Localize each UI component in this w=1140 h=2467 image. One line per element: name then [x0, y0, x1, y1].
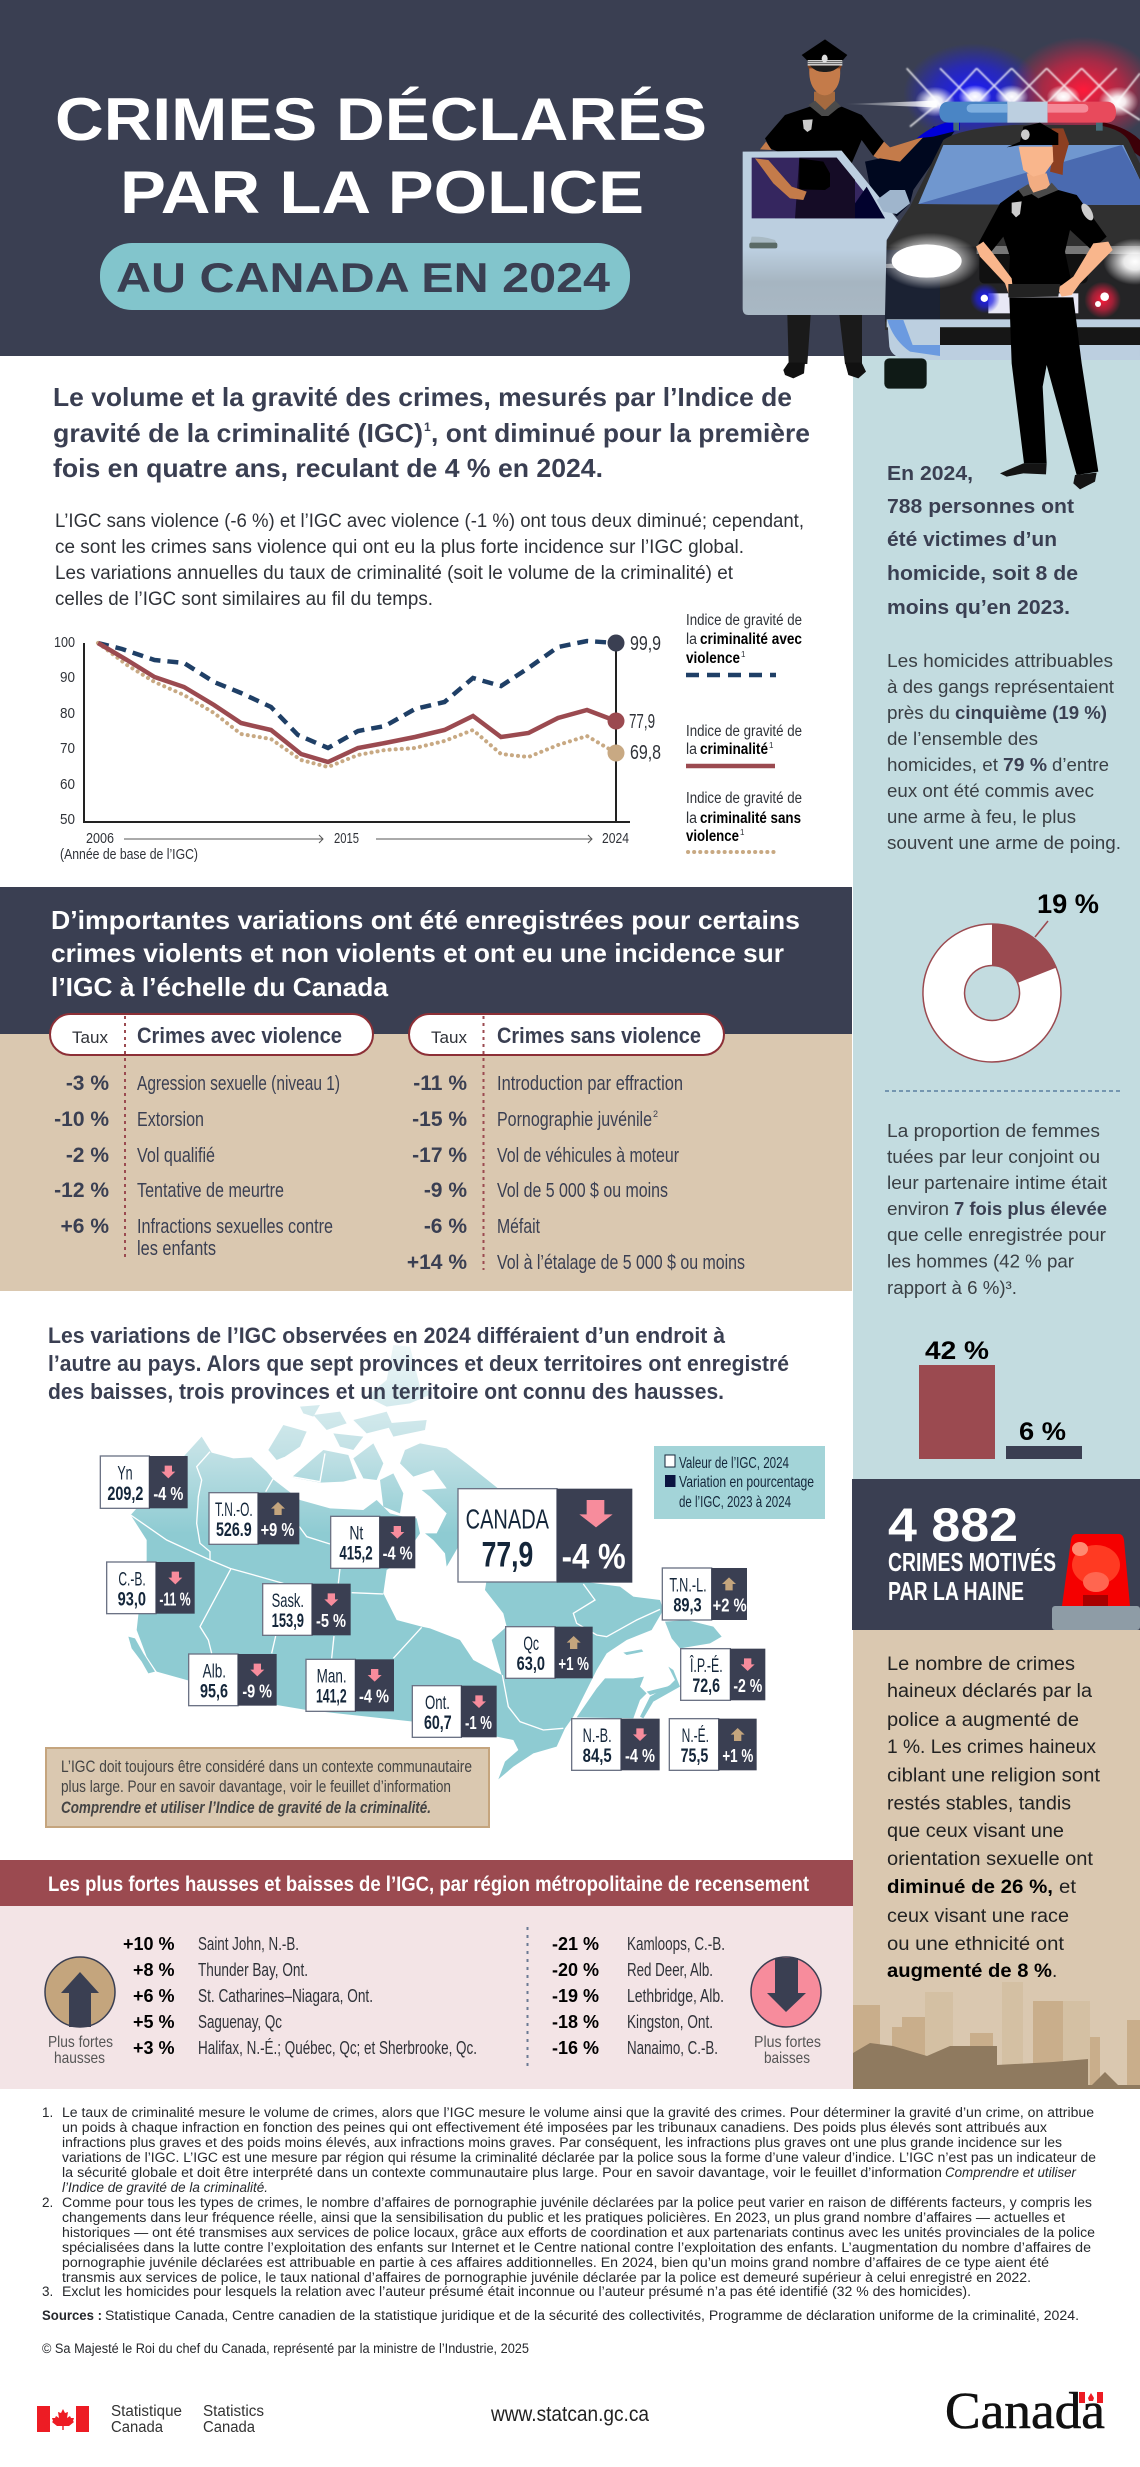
data box: Saskatchewan: -5 % [316, 1610, 346, 1631]
text block: gang-related homicides: une arme à feu, le plus [887, 807, 1076, 827]
table: violent crimes: Agression sexuelle (niveau 1) [137, 1072, 340, 1095]
text block: hate crime details: police a augmenté de [887, 1710, 1079, 1731]
list: largest increases: Thunder Bay, Ont. [198, 1960, 308, 1980]
list: largest increases: +8 % [133, 1960, 174, 1980]
line chart: 2015 [334, 831, 359, 847]
heading: crime severity decline [53, 382, 810, 483]
footnotes: l’Indice de gravité de la criminalité. [62, 2180, 268, 2195]
footnotes: historiques — ont été transmises aux services de police locaux, grâce aux efforts de coordination et aux partenariats continus avec les unités provinciales de la police [62, 2225, 1095, 2240]
data box: Canada: 77,9 [482, 1536, 533, 1575]
data box: Alberta [189, 1654, 277, 1706]
banner heading: Les plus fortes hausses et baisses de l’IGC, par région métropolitaine de recensement [48, 1873, 809, 1896]
footnotes: 1. [42, 2105, 53, 2120]
subtitle pill [100, 243, 630, 310]
data box: Ontario [412, 1686, 497, 1737]
table: violent crimes: Vol qualifié [137, 1144, 215, 1167]
text block: hate crime details: et [1059, 1877, 1077, 1898]
text block: homicide headline: été victimes d’un [887, 529, 1057, 551]
text block: gang-related homicides: homicides, et [887, 755, 998, 775]
data box: Canada [458, 1489, 632, 1583]
text block: hate crime details: Le nombre de crimes [887, 1654, 1075, 1675]
text block: gang-related homicides [887, 651, 1121, 853]
text block: homicide headline: En 2024, [887, 463, 973, 485]
list: largest decreases: -16 % [552, 2038, 599, 2058]
chart legend: criminalité avec [700, 631, 802, 648]
banner heading [0, 1860, 853, 1906]
map legend: Valeur de l’IGC, 2024 [679, 1455, 789, 1472]
callout: community context note: L’IGC doit toujours être considéré dans un contexte communautaire [61, 1758, 472, 1776]
text block: hate crime details: orientation sexuelle ont [887, 1849, 1094, 1870]
text block: hate crime details: ciblant une religion sont [887, 1766, 1101, 1786]
line chart: 90 [60, 670, 75, 686]
sidebar: hate crimes [852, 1479, 1140, 2089]
table: non-violent crimes: Pornographie juvénile [497, 1108, 652, 1131]
table: violent crimes: -12 % [54, 1179, 109, 1202]
footnotes: Comme pour tous les types de crimes, le nombre d’affaires de pornographie juvénile déclarées par la police peut varier en raison de différents facteurs, y compris les [62, 2195, 1092, 2210]
panel: metropolitan areas [0, 1860, 853, 2089]
male officer [760, 39, 954, 378]
data box: Alberta: -9 % [242, 1680, 272, 1701]
table: non-violent crimes: Crimes sans violence [497, 1023, 701, 1048]
heading: crime severity decline: Le volume et la gravité des crimes, mesurés par l’Indice de [53, 382, 792, 412]
footnotes: changements dans leur fréquence réelle, ainsi que la sensibilisation du public et les pratiques policières. En 2023, un plus grand nombre d’affaires — actuelles et [62, 2210, 1065, 2225]
list: largest increases: St. Catharines–Niagara, Ont. [198, 1986, 373, 2006]
data box: Ontario: 60,7 [424, 1713, 452, 1734]
icon: up arrow: Plus fortes [48, 2034, 113, 2051]
list: largest increases [123, 1934, 477, 2058]
footnotes: pornographie juvénile déclarées est attribuable en partie à ces affaires additionnelles. En 2024, bien qu’un moins grand nombre d’affaires de ce type aient été [62, 2255, 1049, 2270]
data box: Northwest Territories [209, 1493, 299, 1544]
footnotes: Sources : [42, 2308, 102, 2323]
footnotes: Exclut les homicides pour lesquels la relation avec l’auteur présumé était inconnue ou l’auteur présumé n’a pas été identifié (32 % des homicides). [62, 2284, 971, 2299]
list: largest decreases: -21 % [552, 1934, 599, 1954]
footnotes: spécialisées dans la lutte contre l’exploitation des enfants sur Internet et le Centre national contre l’exploitation des enfants. L’augmentation du nombre d’affaires de [62, 2240, 1091, 2255]
text block: intimate partner homicide [887, 1121, 1107, 1298]
data box: Newfoundland and Labrador: 89,3 [673, 1595, 702, 1616]
stat banner: PAR LA HAINE [888, 1576, 1024, 1606]
table: violent crimes: Extorsion [137, 1108, 204, 1131]
panel: violent and non-violent crime changes [0, 887, 852, 1291]
heading: important variations: l’IGC à l’échelle du Canada [51, 972, 389, 1002]
chart legend: violence [686, 828, 739, 845]
text block: intimate partner homicide: 7 fois plus élevée [954, 1199, 1107, 1219]
map of Canada [100, 1345, 765, 1779]
skyline illustration [853, 1982, 1140, 2089]
text block: intimate partner homicide: La proportion de femmes [887, 1121, 1100, 1141]
icon: down arrow: baisses [764, 2050, 810, 2067]
table: non-violent crimes: -17 % [412, 1144, 467, 1167]
data box: Quebec: 63,0 [517, 1654, 545, 1675]
text block: explanation [55, 511, 804, 610]
stat banner [852, 1479, 1140, 1630]
heading: regional variation [48, 1323, 789, 1404]
data box: Canada: -4 % [562, 1537, 626, 1576]
data box: British Columbia [107, 1562, 195, 1614]
list: largest decreases: Kingston, Ont. [627, 2012, 713, 2032]
table: non-violent crimes: 2 [653, 1109, 658, 1119]
table: non-violent crimes: -11 % [413, 1072, 467, 1095]
text block: explanation: Les variations annuelles du taux de criminalité (soit le volume de la criminalité) et [55, 563, 734, 584]
line chart: 99,9 [630, 633, 661, 655]
data box: Manitoba: -4 % [359, 1686, 389, 1707]
text block: intimate partner homicide: tuées par leur conjoint ou [887, 1147, 1100, 1167]
callout: community context note: Comprendre et utiliser l’Indice de gravité de la criminalité. [61, 1799, 431, 1817]
chart legend [686, 612, 802, 852]
bar chart: women vs men: 6 % [1019, 1418, 1066, 1446]
list: largest decreases: Red Deer, Alb. [627, 1960, 713, 1980]
data box: Newfoundland and Labrador [662, 1568, 747, 1620]
footnotes: Statistique Canada, Centre canadien de la statistique juridique et de la sécurité des collectivités, Programme de déclaration uniforme de la criminalité, 2024. [105, 2308, 1079, 2323]
title: PAR LA POLICE [120, 159, 644, 226]
list: largest increases: +3 % [133, 2038, 174, 2058]
data box: Yukon [100, 1456, 188, 1508]
heading: regional variation: Les variations de l’IGC observées en 2024 différaient d’un endroit à [48, 1323, 726, 1348]
bar chart: women vs men: 42 % [925, 1337, 989, 1365]
icon: up arrow [45, 1957, 115, 2067]
data box: British Columbia: 93,0 [118, 1589, 146, 1610]
data box: British Columbia: -11 % [159, 1588, 191, 1609]
map legend [654, 1446, 825, 1519]
line chart: 50 [60, 812, 75, 828]
data box: Newfoundland and Labrador: +2 % [713, 1594, 747, 1615]
data box: New Brunswick: N.-B. [583, 1726, 612, 1747]
data box: Nunavut: 415,2 [339, 1544, 373, 1565]
table: violent crimes: Crimes avec violence [137, 1023, 342, 1048]
data box: Nova Scotia: +1 % [722, 1745, 754, 1766]
table: non-violent crimes: Vol à l’étalage de 5 000 $ ou moins [497, 1251, 745, 1274]
text block: intimate partner homicide: environ [887, 1199, 949, 1219]
chart legend: 1 [740, 828, 745, 837]
chart legend: la [686, 810, 697, 827]
text block: hate crime details: diminué de 26 %, [887, 1877, 1053, 1898]
text block: hate crime details: haineux déclarés par la [887, 1681, 1092, 1702]
Statistics Canada signature: Canada [111, 2419, 163, 2436]
list: largest increases: +5 % [133, 2012, 174, 2032]
text block: hate crime details: que ceux visant une [887, 1821, 1064, 1842]
data box: Manitoba: 141,2 [316, 1687, 347, 1708]
female officer [976, 123, 1113, 489]
list: largest decreases: -19 % [552, 1986, 599, 2006]
text block: gang-related homicides: 79 % [1003, 755, 1047, 775]
list: largest increases: Saint John, N.-B. [198, 1934, 299, 1954]
Statistics Canada signature [37, 2403, 264, 2436]
list: largest increases: +10 % [123, 1934, 174, 1954]
title [55, 86, 707, 226]
data box: Northwest Territories: 526.9 [216, 1520, 252, 1541]
data box: Ontario: -1 % [465, 1712, 492, 1733]
list: largest increases: Saguenay, Qc [198, 2012, 282, 2032]
table: non-violent crimes: +14 % [407, 1251, 467, 1274]
data box: Prince Edward Island [681, 1649, 765, 1700]
stat banner: 4 882 [888, 1498, 1018, 1551]
footnotes [42, 2105, 1096, 2356]
Statistics Canada signature: Statistics [203, 2403, 264, 2420]
text block: hate crime details: augmenté de 8 % [887, 1961, 1052, 1982]
text block: homicide headline [887, 463, 1078, 619]
chart legend: 1 [741, 650, 746, 659]
data box: Quebec: Qc [523, 1634, 539, 1655]
data box: Yukon: Yn [117, 1463, 133, 1484]
table: violent crimes: Tentative de meurtre [137, 1179, 284, 1202]
heading: regional variation: l’autre au pays. Alors que sept provinces et deux territoires ont enregistré [48, 1351, 789, 1376]
text block: explanation: L’IGC sans violence (-6 %) et l’IGC avec violence (-1 %) ont tous deux diminué; cependant, [55, 511, 804, 532]
footnotes: la sécurité globale et doit être interprété dans un contexte communautaire plus large. Pour en savoir davantage, voir le feuillet d’information [62, 2165, 942, 2180]
text block: hate crime details: 1 %. Les crimes haineux [887, 1737, 1096, 1758]
chart legend: 1 [769, 741, 774, 750]
data box: Alberta: 95,6 [200, 1681, 228, 1702]
line chart: 100 [54, 635, 75, 651]
table: violent crimes: -2 % [66, 1144, 109, 1167]
data box: Newfoundland and Labrador: T.N.-L. [669, 1575, 707, 1596]
table: violent crimes: -10 % [54, 1108, 109, 1131]
text block: hate crime details [887, 1654, 1101, 1982]
data box: Prince Edward Island: Î.P.-É. [689, 1654, 723, 1677]
data box: Saskatchewan: Sask. [272, 1591, 304, 1612]
heading: crime severity decline: gravité de la criminalité (IGC) [53, 418, 423, 448]
text block: explanation: celles de l’IGC sont similaires au fil du temps. [55, 589, 433, 610]
list: largest increases: +6 % [133, 1986, 174, 2006]
icon: down arrow: Plus fortes [754, 2034, 821, 2051]
table: non-violent crimes: Introduction par effraction [497, 1072, 683, 1095]
data box: Yukon: 209,2 [107, 1484, 143, 1505]
data box: Manitoba [306, 1659, 394, 1711]
footnotes: 2. [42, 2195, 53, 2210]
Statistics Canada signature: Statistique [111, 2403, 182, 2420]
text block: gang-related homicides: d’entre [1052, 755, 1109, 775]
donut chart: 19 percent: 19 % [1037, 889, 1099, 919]
data box: Manitoba: Man. [317, 1667, 347, 1688]
text block: homicide headline: moins qu’en 2023. [887, 597, 1070, 619]
chart legend: violence [686, 650, 740, 667]
data box: Nunavut: -4 % [383, 1543, 413, 1564]
chart legend: la [686, 631, 697, 648]
data box: Nunavut [331, 1516, 415, 1568]
footnotes: 3. [42, 2284, 53, 2299]
panel: regional map [46, 1323, 825, 1827]
footnotes: infractions plus graves et des poids moins élevés, aux infractions moins graves. Par conséquent, les infractions plus graves ont une plus grande incidence sur les [62, 2135, 1062, 2150]
text block: intimate partner homicide: les hommes (42 % par [887, 1252, 1074, 1272]
data box: New Brunswick: 84,5 [583, 1746, 612, 1767]
line chart: 69,8 [630, 742, 661, 764]
data box: Quebec: +1 % [558, 1653, 589, 1674]
data box: Nova Scotia: N.-É. [682, 1724, 709, 1747]
icon: Canadian flag [37, 2406, 89, 2432]
data box: British Columbia: C.-B. [118, 1569, 146, 1590]
line chart: 77,9 [629, 711, 655, 733]
heading: important variations: D’importantes variations ont été enregistrées pour certains [51, 905, 800, 935]
table: non-violent crimes: Taux [431, 1028, 467, 1047]
heading: regional variation: des baisses, trois provinces et un territoire ont connu des hausses. [48, 1379, 724, 1404]
table: non-violent crimes: -15 % [412, 1108, 467, 1131]
list: largest decreases: -18 % [552, 2012, 599, 2032]
bar chart: women vs men [919, 1337, 1082, 1459]
data box: Canada: CANADA [466, 1503, 549, 1534]
table: violent crimes: Infractions sexuelles contre [137, 1215, 333, 1238]
panel: IGC overview [53, 382, 810, 863]
chart legend: Indice de gravité de [686, 723, 802, 740]
text block: explanation: ce sont les crimes sans violence qui ont eu la plus forte incidence sur l’IGC global. [55, 537, 744, 558]
data box: Northwest Territories: T.N.-O. [215, 1500, 253, 1521]
table: violent crimes [50, 1014, 373, 1260]
table: non-violent crimes: -9 % [424, 1179, 467, 1202]
text block: gang-related homicides: souvent une arme de poing. [887, 833, 1121, 853]
stat banner: CRIMES MOTIVÉS [888, 1547, 1056, 1577]
list: largest decreases [552, 1934, 725, 2058]
table: non-violent crimes: -6 % [424, 1215, 467, 1238]
map legend: Variation en pourcentage [679, 1474, 814, 1491]
chart legend: criminalité sans [700, 810, 801, 827]
data box: Prince Edward Island: 72,6 [692, 1676, 720, 1697]
text block: gang-related homicides: à des gangs représentaient [887, 677, 1114, 697]
line chart: 80 [60, 706, 75, 722]
footnotes: un poids à chaque infraction en fonction des peines qui ont effectivement été imposées par les tribunaux canadiens. Des poids plus élevés sont attribués aux [62, 2120, 1047, 2135]
data box: Yukon: -4 % [153, 1483, 184, 1504]
text block: intimate partner homicide: rapport à 6 %)³. [887, 1278, 1017, 1298]
data box: Ontario: Ont. [425, 1693, 450, 1714]
footnotes: variations de l’IGC. L’IGC est une mesure par région qui résume la criminalité déclarée par la police sous la forme d’une valeur d’indice. L’IGC n’est pas un indicateur de [62, 2150, 1096, 2165]
heading: crime severity decline: 1 [424, 420, 431, 434]
text block: hate crime details: ceux visant une race [887, 1906, 1069, 1927]
text block: hate crime details: . [1052, 1961, 1057, 1982]
line chart: 70 [60, 741, 75, 757]
heading: crime severity decline: fois en quatre ans, reculant de 4 % en 2024. [53, 453, 603, 483]
text block: homicide headline: 788 personnes ont [887, 496, 1074, 518]
table: non-violent crimes: Méfait [497, 1215, 540, 1238]
text block: gang-related homicides: eux ont été commis avec [887, 781, 1094, 801]
heading: important variations [51, 905, 800, 1002]
list: largest decreases: Nanaimo, C.-B. [627, 2038, 718, 2058]
donut chart: 19 percent [923, 889, 1099, 1062]
chart legend: Indice de gravité de [686, 612, 802, 629]
title: CRIMES DÉCLARÉS [55, 86, 707, 153]
callout: community context note: plus large. Pour en savoir davantage, voir le feuillet d’information [61, 1778, 451, 1796]
text block: hate crime details: restés stables, tandis [887, 1794, 1071, 1814]
data box: Saskatchewan: 153,9 [272, 1611, 304, 1632]
chart legend: la [686, 741, 697, 758]
data box: Alberta: Alb. [203, 1661, 226, 1682]
data box: Nova Scotia: 75,5 [681, 1746, 709, 1767]
icon: up arrow: hausses [54, 2050, 105, 2067]
footnotes: Comprendre et utiliser [945, 2165, 1076, 2180]
table: non-violent crimes [407, 1014, 745, 1274]
chart legend: criminalité [700, 741, 768, 758]
text block: gang-related homicides: cinquième (19 %) [955, 703, 1107, 723]
Statistics Canada signature: Canada [203, 2419, 255, 2436]
footnotes: transmis aux services de police, le taux national d’affaires de pornographie juvénile déclarée par la police est demeuré supérieur à celui enregistré en 2022. [62, 2270, 1031, 2285]
callout: community context note [46, 1748, 489, 1827]
line chart: 2024 [602, 831, 629, 847]
data box: New Brunswick: -4 % [625, 1745, 655, 1766]
list: largest decreases: Kamloops, C.-B. [627, 1934, 725, 1954]
data box: Northwest Territories: +9 % [261, 1519, 295, 1540]
subtitle pill: AU CANADA EN 2024 [116, 254, 611, 301]
text block: gang-related homicides: Les homicides attribuables [887, 651, 1113, 671]
heading: crime severity decline: , ont diminué pour la première [431, 418, 810, 448]
text block: gang-related homicides: près du [887, 703, 950, 723]
text block: intimate partner homicide: leur partenaire intime était [887, 1173, 1107, 1193]
table: violent crimes: les enfants [137, 1237, 216, 1260]
data box: Saskatchewan [263, 1584, 351, 1635]
car door with window [743, 151, 910, 315]
website URL: www.statcan.gc.ca [490, 2403, 649, 2426]
table: non-violent crimes: Vol de 5 000 $ ou moins [497, 1179, 668, 1202]
text block: gang-related homicides: de l’ensemble des [887, 729, 1038, 749]
Canada wordmark: Canada [945, 2383, 1105, 2440]
patrol car [847, 102, 1140, 389]
icon: red alarm light [1052, 1534, 1140, 1630]
chart legend: Indice de gravité de [686, 790, 802, 807]
sidebar: homicides [885, 463, 1123, 1459]
line chart: 60 [60, 777, 75, 793]
header band [0, 0, 1140, 356]
line chart: (Année de base de l’IGC) [60, 847, 198, 863]
table: violent crimes: +6 % [61, 1215, 109, 1238]
footnotes: Le taux de criminalité mesure le volume de crimes, alors que l’IGC mesure le volume ainsi que la gravité des crimes. Pour déterminer la gravité d’un crime, on attribue [62, 2105, 1094, 2120]
text block: hate crime details: ou une ethnicité ont [887, 1934, 1065, 1955]
map legend: de l’IGC, 2023 à 2024 [679, 1494, 791, 1511]
data box: Nunavut: Nt [349, 1524, 364, 1545]
line chart: 2006 [86, 831, 114, 847]
page background panels [853, 356, 1140, 2089]
table: violent crimes: Taux [72, 1028, 108, 1047]
icon: down arrow [751, 1957, 821, 2067]
table: violent crimes: -3 % [66, 1072, 109, 1095]
text block: homicide headline: homicide, soit 8 de [887, 563, 1078, 585]
text block: intimate partner homicide: que celle enregistrée pour [887, 1225, 1106, 1245]
data box: Nova Scotia [669, 1719, 757, 1770]
list: largest increases: Halifax, N.-É.; Québec, Qc; et Sherbrooke, Qc. [198, 2038, 477, 2058]
illustration: police officers and patrol car [743, 37, 1140, 489]
list: largest decreases: -20 % [552, 1960, 599, 1980]
line chart [54, 633, 661, 863]
heading: important variations: crimes violents et non violents et ont eu une incidence sur [51, 938, 784, 968]
data box: Prince Edward Island: -2 % [733, 1675, 763, 1696]
data box: Quebec [506, 1627, 593, 1678]
footnotes: © Sa Majesté le Roi du chef du Canada, représenté par la ministre de l’Industrie, 2025 [42, 2341, 529, 2356]
list: largest decreases: Lethbridge, Alb. [627, 1986, 724, 2006]
table: non-violent crimes: Vol de véhicules à moteur [497, 1144, 679, 1167]
data box: New Brunswick [572, 1719, 660, 1770]
